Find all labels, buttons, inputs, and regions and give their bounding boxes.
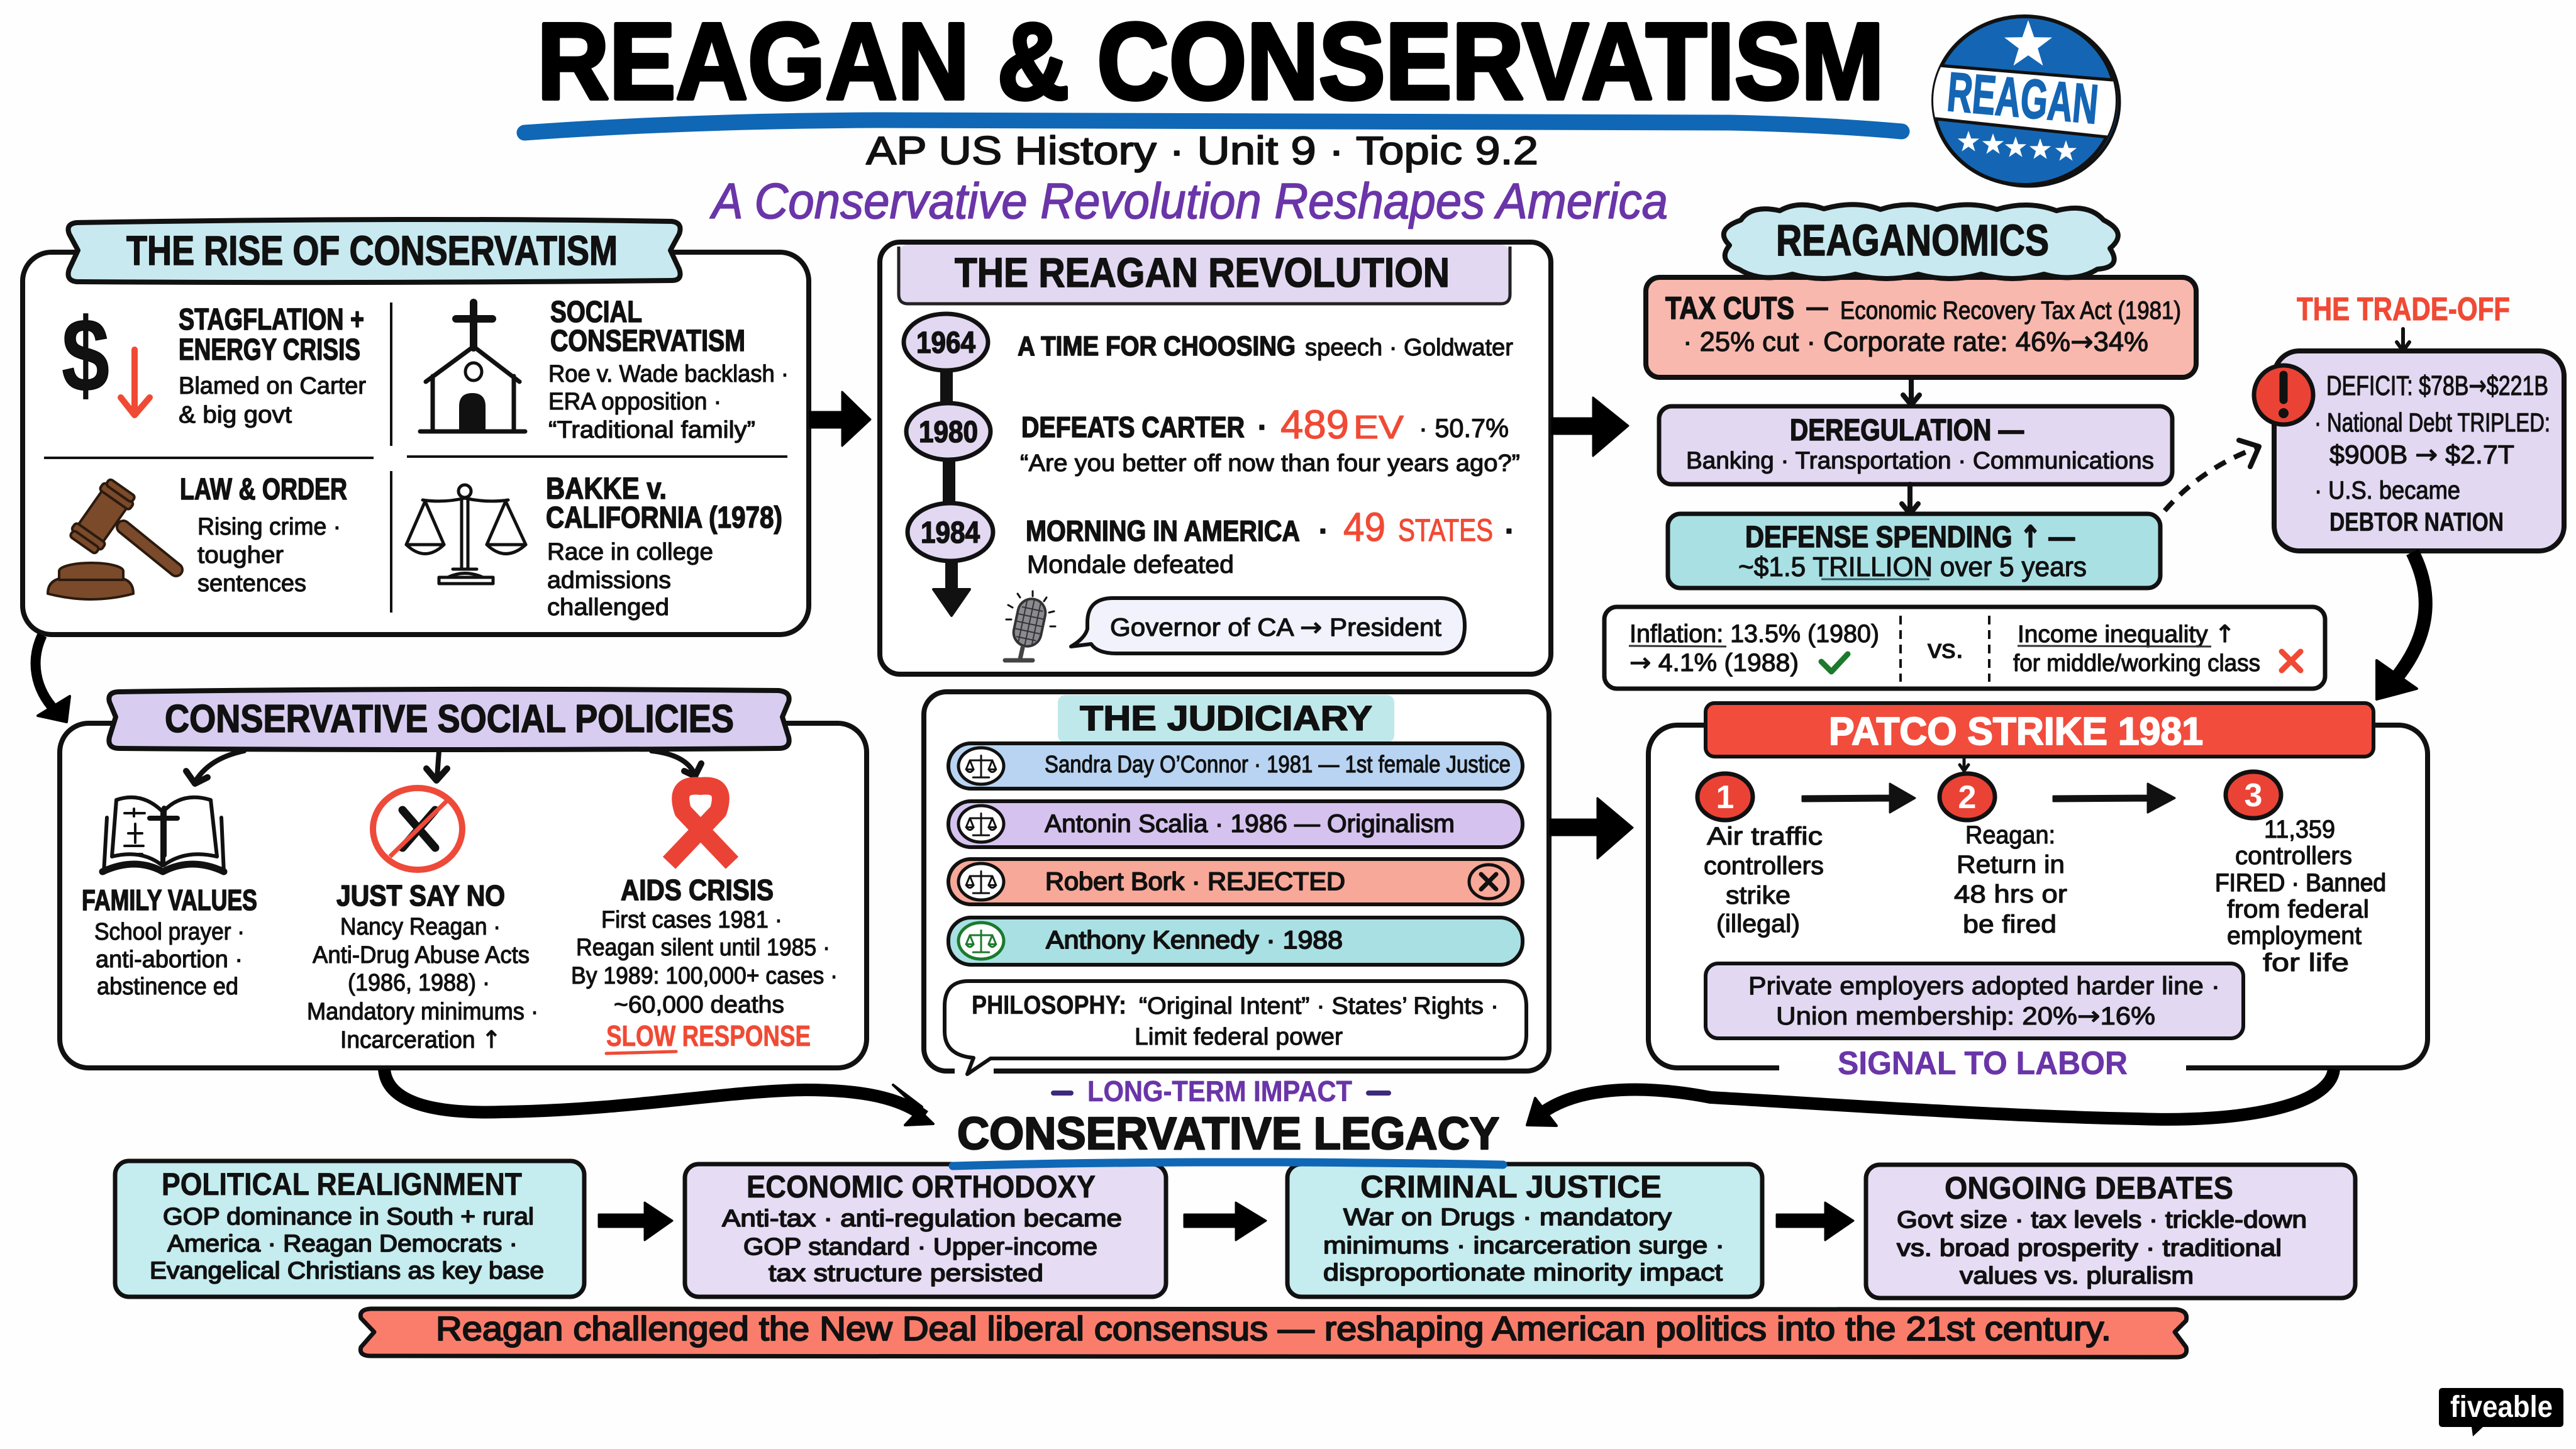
arrow: PATCO to legacy bbox=[1527, 1069, 2334, 1126]
text: social conservatism: “Traditional family” bbox=[548, 417, 755, 443]
heading ribbon: conservative social policies bbox=[109, 689, 789, 750]
text: bakke v. california: Race in college bbox=[547, 539, 713, 565]
box: deficit list bbox=[2274, 351, 2564, 551]
arrow: rise to revolution bbox=[810, 392, 870, 446]
arrow: dashed to trade-off bbox=[2165, 440, 2259, 511]
logo: fiveable bbox=[2439, 1388, 2563, 1436]
box: private employers bbox=[1706, 963, 2243, 1038]
box: political realignment: Evangelical Christians as key base bbox=[150, 1258, 544, 1284]
heading ribbon: the rise of conservatism: THE RISE OF CONSERVATISM bbox=[126, 227, 618, 274]
step 2 bbox=[1940, 774, 2067, 938]
box: defense spending: ~$1.5 TRILLION over 5 years bbox=[1738, 552, 2087, 582]
row: Scalia bbox=[948, 801, 1523, 847]
icon: alert bbox=[2254, 365, 2313, 425]
icon: Reagan campaign button bbox=[1931, 16, 2119, 186]
box: criminal justice: minimums · incarceration surge · bbox=[1323, 1233, 1724, 1259]
row: Bork: Robert Bork · REJECTED bbox=[1045, 868, 1345, 896]
text: bakke v. california bbox=[546, 472, 782, 621]
panel: PATCO strike bbox=[1648, 703, 2428, 1082]
text: morning in America: STATES bbox=[1398, 513, 1493, 548]
text: social conservatism: SOCIAL bbox=[550, 296, 642, 329]
box: deregulation: Banking · Transportation · Communications bbox=[1686, 448, 2154, 474]
step 3: controllers bbox=[2235, 842, 2352, 870]
arrows: branches from heading bbox=[186, 751, 701, 784]
arrow: revolution to reaganomics bbox=[1552, 397, 1628, 456]
heading: the trade-off: THE TRADE-OFF bbox=[2297, 291, 2510, 328]
step 1: Air traffic bbox=[1707, 823, 1823, 850]
text: bakke v. california: CALIFORNIA (1978) bbox=[546, 501, 782, 535]
step 1: controllers bbox=[1704, 852, 1824, 880]
heading: PATCO strike 1981: PATCO STRIKE 1981 bbox=[1829, 710, 2203, 753]
tagline: A Conservative Revolution Reshapes America bbox=[709, 173, 1668, 229]
row: O'Connor: Sandra Day O’Connor · 1981 — 1st female Justice bbox=[1045, 752, 1511, 778]
text: stagflation bbox=[179, 303, 366, 428]
step 2: Reagan: bbox=[1965, 821, 2055, 849]
heading ribbon: conservative social policies: CONSERVATIVE SOCIAL POLICIES bbox=[165, 697, 734, 741]
box: criminal justice bbox=[1287, 1164, 1762, 1297]
step 3: employment bbox=[2227, 922, 2362, 950]
box: political realignment bbox=[115, 1161, 584, 1297]
timeline: 1964 bbox=[916, 326, 975, 360]
text: social conservatism bbox=[548, 296, 789, 443]
heading ribbon: the rise of conservatism bbox=[68, 219, 680, 282]
step 2: Return in bbox=[1957, 851, 2065, 879]
box: economic orthodoxy: tax structure persisted bbox=[769, 1260, 1043, 1287]
text: stagflation: Blamed on Carter bbox=[179, 373, 366, 399]
step 2: be fired bbox=[1963, 911, 2057, 938]
text: morning in America: MORNING IN AMERICA bbox=[1026, 514, 1300, 547]
box: inflation vs inequality: Inflation: 13.5% (1980) bbox=[1629, 620, 1879, 648]
box: criminal justice: CRIMINAL JUSTICE bbox=[1360, 1169, 1662, 1204]
text: morning in America: Mondale defeated bbox=[1027, 551, 1234, 579]
icon: microphone bbox=[1005, 591, 1055, 660]
box: political realignment: America · Reagan Democrats · bbox=[167, 1231, 518, 1257]
text: morning in America: 49 bbox=[1343, 504, 1385, 550]
box: economic orthodoxy: Anti-tax · anti-regulation became bbox=[722, 1206, 1122, 1232]
text: AIDS crisis: Reagan silent until 1985 · bbox=[576, 935, 830, 961]
row: Scalia: Antonin Scalia · 1986 — Originalism bbox=[1045, 810, 1455, 838]
box: economic orthodoxy: ECONOMIC ORTHODOXY bbox=[747, 1169, 1096, 1204]
step 3: 11,359 bbox=[2264, 816, 2335, 843]
text: a time for choosing: A TIME FOR CHOOSING bbox=[1018, 331, 1296, 362]
text: law and order: LAW & ORDER bbox=[180, 473, 347, 506]
callout: philosophy: Limit federal power bbox=[1135, 1024, 1343, 1050]
panel: the judiciary bbox=[924, 692, 1549, 1074]
timeline: 1980 bbox=[919, 416, 978, 449]
box: economic orthodoxy: GOP standard · Upper-income bbox=[743, 1234, 1097, 1260]
panel: the Reagan revolution bbox=[880, 242, 1551, 674]
box: inflation vs inequality bbox=[1604, 607, 2325, 689]
step 1: (illegal) bbox=[1716, 910, 1800, 938]
arrow: step 2 to 3 bbox=[2053, 784, 2175, 813]
banner: closing statement: Reagan challenged the New Deal liberal consensus — reshaping American politics into the 21st century. bbox=[436, 1310, 2111, 1348]
text: law and order: Rising crime · bbox=[197, 514, 341, 540]
text: law and order: sentences bbox=[197, 570, 306, 597]
step 2: 48 hrs or bbox=[1954, 880, 2067, 908]
icon: gavel bbox=[48, 477, 176, 599]
step 1: strike bbox=[1726, 882, 1790, 909]
text: family values: anti-abortion · bbox=[96, 947, 243, 973]
arrow: rise to social policies bbox=[36, 635, 70, 722]
arrow: judiciary to PATCO bbox=[1550, 798, 1633, 858]
icon: Reagan campaign button: REAGAN bbox=[1945, 60, 2101, 135]
box: defense spending: DEFENSE SPENDING ↑ — bbox=[1745, 519, 2075, 555]
heading: reaganomics cloud bbox=[1724, 204, 2118, 279]
text: stagflation: ENERGY CRISIS bbox=[179, 333, 360, 367]
arrow: step 1 to 2 bbox=[1802, 784, 1915, 813]
text: defeats Carter: · bbox=[1258, 411, 1267, 443]
text: law and order: tougher bbox=[197, 542, 284, 569]
text: just say no: Anti-Drug Abuse Acts bbox=[313, 942, 530, 969]
title: REAGAN & CONSERVATISM bbox=[537, 0, 1884, 122]
icon: church bbox=[420, 303, 525, 431]
icon: dollar with falling arrow: $ bbox=[62, 297, 109, 414]
box: political realignment: GOP dominance in South + rural bbox=[163, 1204, 534, 1230]
box: economic orthodoxy bbox=[685, 1164, 1166, 1297]
step 3: for life bbox=[2263, 949, 2349, 977]
banner: closing statement bbox=[360, 1307, 2187, 1358]
text: bakke v. california: challenged bbox=[547, 594, 669, 621]
heading: the judiciary bbox=[1058, 695, 1394, 743]
label: long-term impact: LONG-TERM IMPACT bbox=[1087, 1075, 1352, 1108]
text: defeats Carter: 489 bbox=[1280, 402, 1349, 447]
box: deregulation bbox=[1659, 406, 2172, 484]
text: morning in America: · bbox=[1319, 514, 1328, 547]
panel: reaganomics flow bbox=[1604, 204, 2325, 689]
text: social conservatism: Roe v. Wade backlash · bbox=[548, 361, 789, 387]
heading: PATCO strike 1981 bbox=[1706, 703, 2373, 757]
arrow: trade-off down bbox=[2397, 329, 2409, 351]
text: defeats Carter: EV bbox=[1353, 409, 1404, 446]
box: tax cuts: Economic Recovery Tax Act (1981) bbox=[1840, 297, 2181, 325]
box: inflation vs inequality: vs. bbox=[1928, 634, 1963, 663]
box: ongoing debates: vs. broad prosperity · traditional bbox=[1897, 1235, 2282, 1262]
arrow: tax cuts to deregulation bbox=[1903, 377, 1919, 405]
box: inflation vs inequality: → 4.1% (1988) bbox=[1629, 648, 1799, 677]
text: defeats Carter bbox=[1020, 402, 1520, 477]
arrow: realignment to orthodoxy bbox=[599, 1202, 672, 1240]
text: family values bbox=[82, 884, 257, 1000]
callout: governor to president: Governor of CA → President bbox=[1110, 613, 1441, 642]
text: stagflation: & big govt bbox=[179, 402, 292, 428]
text: morning in America bbox=[1026, 504, 1514, 579]
callout: philosophy: PHILOSOPHY: bbox=[972, 990, 1126, 1019]
panel: the trade-off bbox=[2254, 291, 2564, 551]
text: AIDS crisis bbox=[571, 874, 838, 1053]
text: just say no: (1986, 1988) · bbox=[348, 970, 490, 996]
heading: reaganomics cloud: REAGANOMICS bbox=[1776, 216, 2049, 265]
step 3: FIRED · Banned bbox=[2215, 869, 2386, 897]
box: private employers: Private employers adopted harder line · bbox=[1748, 972, 2220, 1000]
icon: no drugs bbox=[373, 788, 462, 870]
icon: open bible bbox=[103, 797, 224, 873]
heading: conservative legacy: CONSERVATIVE LEGACY bbox=[957, 1109, 1499, 1159]
box: ongoing debates: ONGOING DEBATES bbox=[1945, 1170, 2233, 1206]
step 1: 1 bbox=[1716, 779, 1734, 816]
step 3: 3 bbox=[2245, 777, 2262, 814]
callout: philosophy: “Original Intent” · States’ Rights · bbox=[1139, 993, 1499, 1019]
arrow: orthodoxy to criminal justice bbox=[1184, 1202, 1266, 1240]
icon: scales of justice bbox=[406, 485, 526, 584]
box: political realignment: POLITICAL REALIGNMENT bbox=[162, 1167, 522, 1202]
box: tax cuts: · 25% cut · Corporate rate: 46%→34% bbox=[1683, 326, 2148, 358]
text: morning in America: · bbox=[1505, 514, 1514, 547]
icon: green check bbox=[1821, 654, 1848, 672]
step 3 bbox=[2215, 772, 2386, 977]
timeline bbox=[904, 314, 993, 616]
box: tax cuts bbox=[1646, 277, 2196, 377]
box: deregulation: DEREGULATION — bbox=[1790, 414, 2024, 447]
row: Bork bbox=[948, 859, 1523, 904]
text: stagflation: STAGFLATION + bbox=[179, 303, 364, 336]
text: AIDS crisis: AIDS CRISIS bbox=[621, 874, 774, 906]
box: tax cuts: TAX CUTS bbox=[1665, 291, 1794, 326]
heading: the Reagan revolution: THE REAGAN REVOLUTION bbox=[955, 249, 1450, 296]
arrow: deregulation to defense bbox=[1902, 484, 1918, 514]
box: deficit list: DEBTOR NATION bbox=[2329, 507, 2504, 536]
text: law and order bbox=[180, 473, 347, 597]
callout: philosophy bbox=[945, 981, 1526, 1074]
text: a time for choosing bbox=[1018, 331, 1513, 362]
logo: fiveable: fiveable bbox=[2450, 1391, 2553, 1424]
box: deficit list: · U.S. became bbox=[2314, 477, 2460, 504]
text: bakke v. california: BAKKE v. bbox=[546, 472, 667, 506]
header group bbox=[525, 0, 1902, 229]
icon: rejected x bbox=[1469, 865, 1508, 899]
text: AIDS crisis: ~60,000 deaths bbox=[614, 992, 784, 1018]
title underline bbox=[525, 120, 1902, 133]
arrow: trade-off to PATCO bbox=[2377, 552, 2426, 699]
text: just say no: Mandatory minimums · bbox=[307, 999, 538, 1025]
box: deficit list: DEFICIT: $78B→$221B bbox=[2326, 370, 2548, 402]
label: signal to labor: SIGNAL TO LABOR bbox=[1838, 1045, 2128, 1082]
icon: red x bbox=[2282, 652, 2301, 670]
arrow: header to step 2 bbox=[1960, 757, 1968, 771]
text: family values: abstinence ed bbox=[97, 974, 238, 1000]
box: private employers: Union membership: 20% →16% bbox=[1776, 1002, 2155, 1031]
arrow: social policies to legacy bbox=[384, 1069, 933, 1125]
row: Kennedy: Anthony Kennedy · 1988 bbox=[1046, 926, 1343, 954]
text: defeats Carter: “Are you better off now than four years ago?” bbox=[1020, 450, 1520, 477]
callout: governor to president bbox=[1071, 598, 1465, 653]
panel: the rise of conservatism bbox=[23, 219, 809, 635]
icon: dollar with falling arrow bbox=[62, 297, 150, 415]
text: AIDS crisis: First cases 1981 · bbox=[601, 907, 782, 933]
timeline: 1984 bbox=[921, 516, 980, 550]
text: social conservatism: ERA opposition · bbox=[548, 389, 721, 415]
row: O'Connor bbox=[948, 743, 1523, 789]
step 3: from federal bbox=[2227, 896, 2369, 923]
text: just say no bbox=[307, 879, 538, 1053]
panel: conservative legacy bbox=[115, 1109, 2355, 1298]
box: criminal justice: disproportionate minority impact bbox=[1323, 1260, 1723, 1286]
text: just say no: Nancy Reagan · bbox=[340, 914, 501, 940]
text: family values: FAMILY VALUES bbox=[82, 884, 257, 916]
arrow: criminal justice to debates bbox=[1777, 1202, 1853, 1240]
heading: the judiciary: THE JUDICIARY bbox=[1080, 698, 1372, 738]
box: ongoing debates bbox=[1866, 1165, 2355, 1298]
icon: AIDS ribbon bbox=[669, 786, 732, 863]
text: just say no: Incarceration ↑ bbox=[340, 1026, 501, 1053]
text: bakke v. california: admissions bbox=[547, 567, 671, 594]
text: AIDS crisis: SLOW RESPONSE bbox=[606, 1019, 811, 1052]
step 2: 2 bbox=[1958, 779, 1976, 816]
text: AIDS crisis: By 1989: 100,000+ cases · bbox=[571, 963, 838, 989]
panel: conservative social policies bbox=[60, 689, 867, 1068]
text: social conservatism: CONSERVATISM bbox=[550, 325, 745, 358]
text: just say no: JUST SAY NO bbox=[336, 879, 505, 912]
box: ongoing debates: values vs. pluralism bbox=[1960, 1263, 2194, 1289]
box: ongoing debates: Govt size · tax levels · trickle-down bbox=[1897, 1207, 2307, 1233]
row: Kennedy bbox=[948, 918, 1523, 965]
box: inflation vs inequality: Income inequality ↑ bbox=[2018, 620, 2235, 648]
text: defeats Carter: · 50.7% bbox=[1419, 413, 1509, 443]
box: inflation vs inequality: for middle/working class bbox=[2013, 650, 2260, 677]
text: family values: School prayer · bbox=[94, 919, 245, 945]
step 1 bbox=[1697, 774, 1824, 938]
box: deficit list: $900B → $2.7T bbox=[2329, 439, 2514, 470]
subtitle: AP US History · Unit 9 · Topic 9.2 bbox=[866, 129, 1538, 173]
box: criminal justice: War on Drugs · mandatory bbox=[1343, 1204, 1672, 1231]
box: defense spending bbox=[1668, 514, 2160, 588]
text: defeats Carter: DEFEATS CARTER bbox=[1021, 411, 1245, 443]
text: a time for choosing: speech · Goldwater bbox=[1305, 335, 1513, 361]
